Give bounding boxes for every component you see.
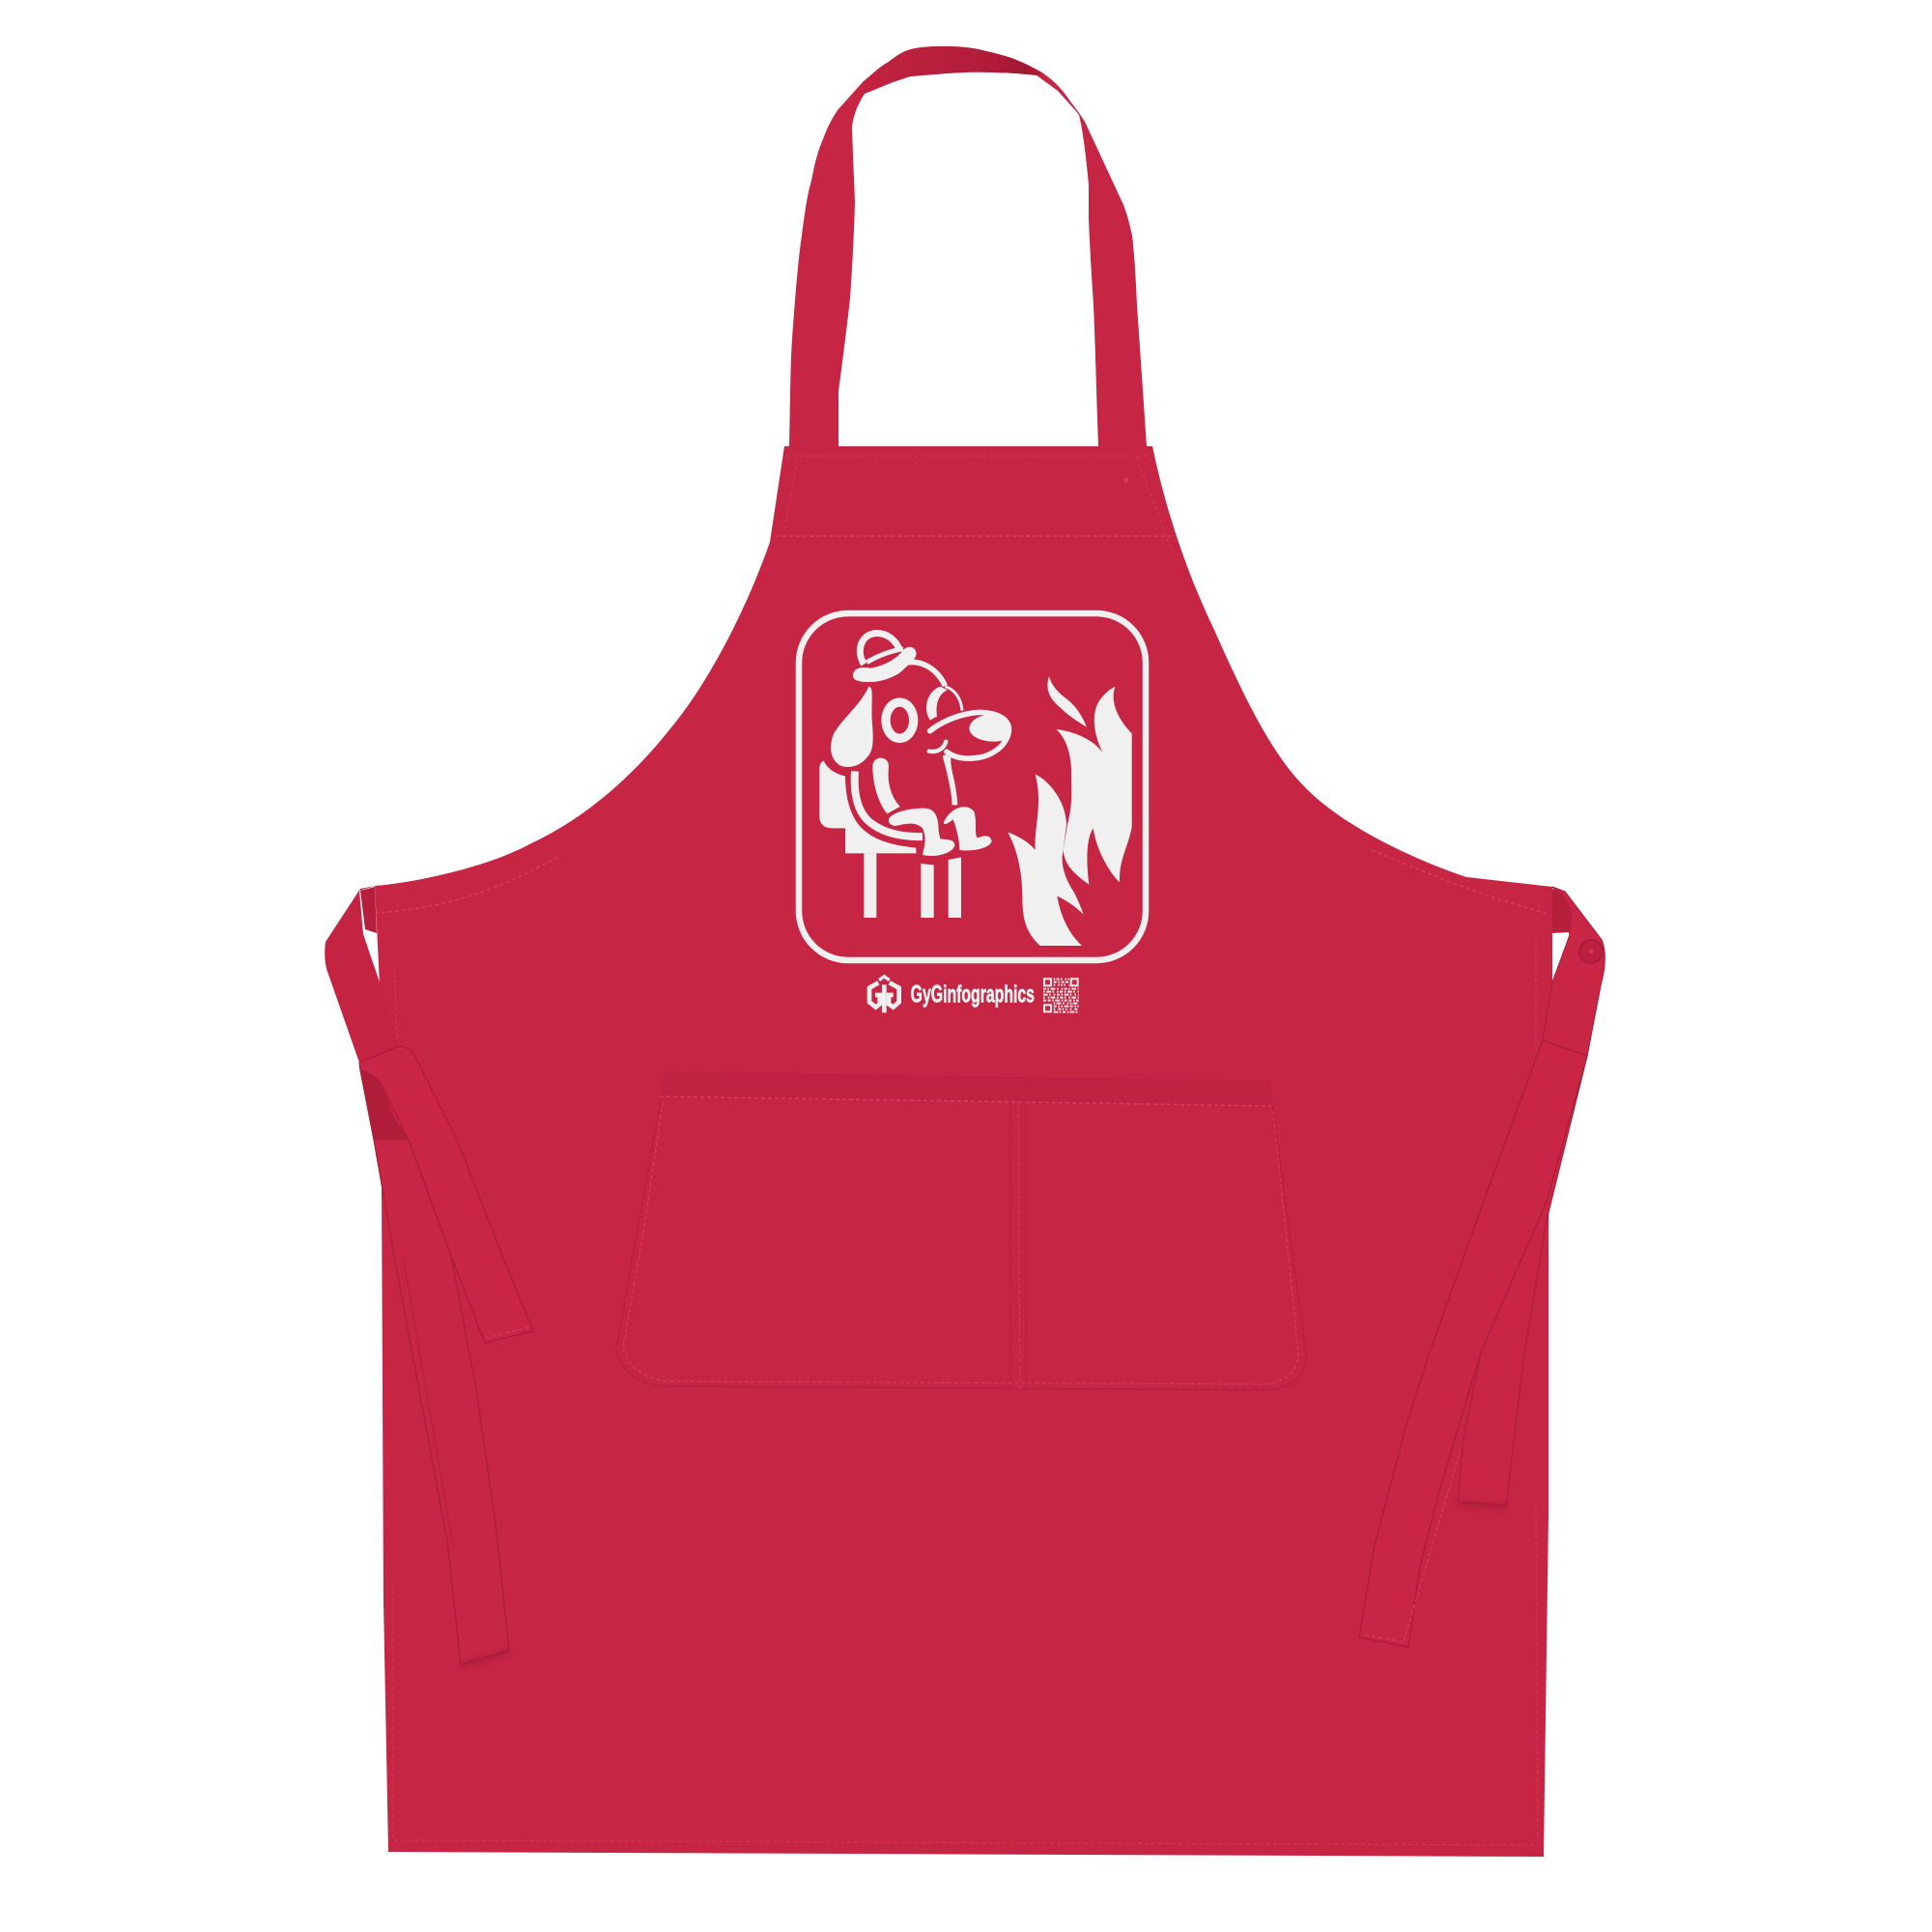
strap end shadows xyxy=(461,1503,1505,1666)
right waist strap xyxy=(1458,887,1605,1505)
dog head and hat xyxy=(831,634,1009,787)
printed logo xyxy=(799,613,1146,1012)
left long strap xyxy=(360,1070,509,1664)
pocket xyxy=(616,1072,1306,1392)
left shoulder gusset xyxy=(360,887,377,933)
left strap loop shading xyxy=(360,1070,409,1140)
QR code xyxy=(1043,979,1079,1012)
brand mark xyxy=(869,977,899,1012)
dog body and chair xyxy=(819,756,992,918)
apron body xyxy=(375,446,1552,1857)
rounded frame xyxy=(799,613,1146,960)
brand name: GyGinfographics xyxy=(911,981,1035,1008)
neck strap xyxy=(789,46,1147,446)
button xyxy=(1579,940,1603,963)
right shoulder gusset xyxy=(1552,889,1573,933)
left shoulder strap xyxy=(325,886,399,1063)
flames xyxy=(1008,676,1132,946)
left short tie xyxy=(359,1046,533,1343)
strap stitching line xyxy=(403,1256,452,1541)
right front strap xyxy=(1359,1040,1587,1647)
